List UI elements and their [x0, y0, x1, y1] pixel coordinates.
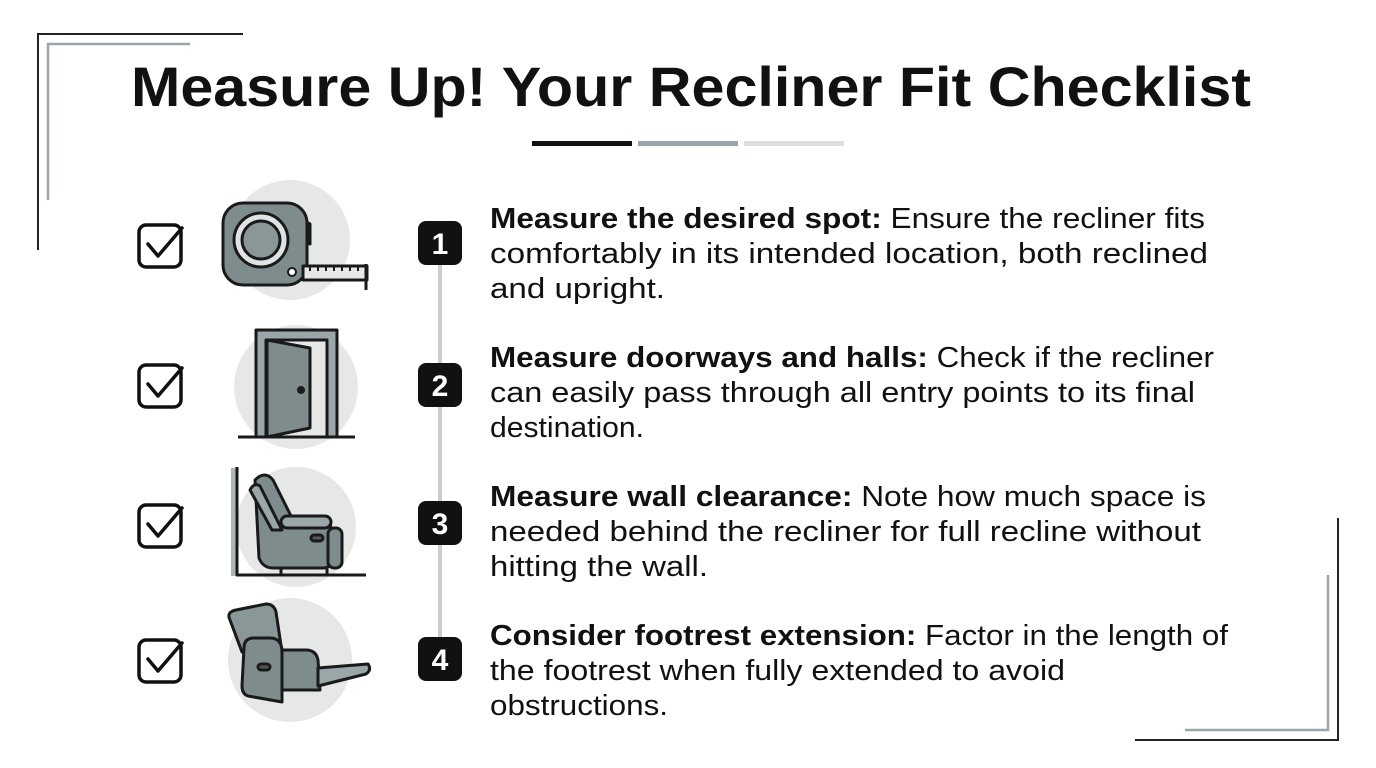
- number badge 4: [418, 637, 462, 681]
- text block 2: Measure doorways and halls: Check if the recliner: [490, 342, 1214, 374]
- icon: tape measure: [223, 180, 367, 300]
- text block 4: obstructions.: [490, 690, 668, 722]
- text block 3: [490, 481, 1206, 583]
- text block 1: [490, 203, 1208, 305]
- row 4: [139, 598, 1229, 722]
- number badge 3: 3: [432, 508, 448, 541]
- number badge 1: 1: [432, 228, 448, 261]
- text block 2: can easily pass through all entry points to its final: [490, 377, 1195, 409]
- text block 3: Measure wall clearance: Note how much space is: [490, 481, 1206, 513]
- corner bracket: top-left: [38, 34, 243, 250]
- text block 3: needed behind the recliner for full recline without: [490, 516, 1201, 548]
- title: Measure Up! Your Recliner Fit Checklist: [131, 55, 1251, 118]
- row 1: [139, 180, 1208, 305]
- text block 4: the footrest when fully extended to avoid: [490, 655, 1065, 687]
- checkbox 2: [139, 365, 182, 407]
- text block 4: Consider footrest extension: Factor in the length of: [490, 620, 1229, 652]
- number badge 2: [418, 363, 462, 407]
- text block 2: [490, 342, 1214, 444]
- text block 1: comfortably in its intended location, both reclined: [490, 238, 1208, 270]
- title underline bars: [532, 141, 844, 146]
- icon: recliner against wall: [231, 467, 366, 587]
- number badge 4: 4: [432, 644, 449, 677]
- checkbox 4: [139, 640, 182, 682]
- checkbox 3: [139, 505, 182, 547]
- number badge 2: 2: [432, 370, 448, 403]
- icon: recliner with footrest extended: [228, 598, 370, 722]
- text block 3: hitting the wall.: [490, 551, 708, 583]
- checkbox 1: [139, 225, 182, 267]
- text block 4: [490, 620, 1229, 722]
- row 2: [139, 325, 1214, 449]
- text block 1: and upright.: [490, 273, 665, 305]
- corner bracket: bottom-right: [1135, 518, 1338, 740]
- row 3: [139, 467, 1206, 587]
- number badge 1: [418, 221, 462, 265]
- timeline connector line: [438, 243, 442, 659]
- text block 2: destination.: [490, 412, 644, 444]
- icon: doorway: [234, 325, 358, 449]
- number badge 3: [418, 501, 462, 545]
- text block 1: Measure the desired spot: Ensure the recliner fits: [490, 203, 1205, 235]
